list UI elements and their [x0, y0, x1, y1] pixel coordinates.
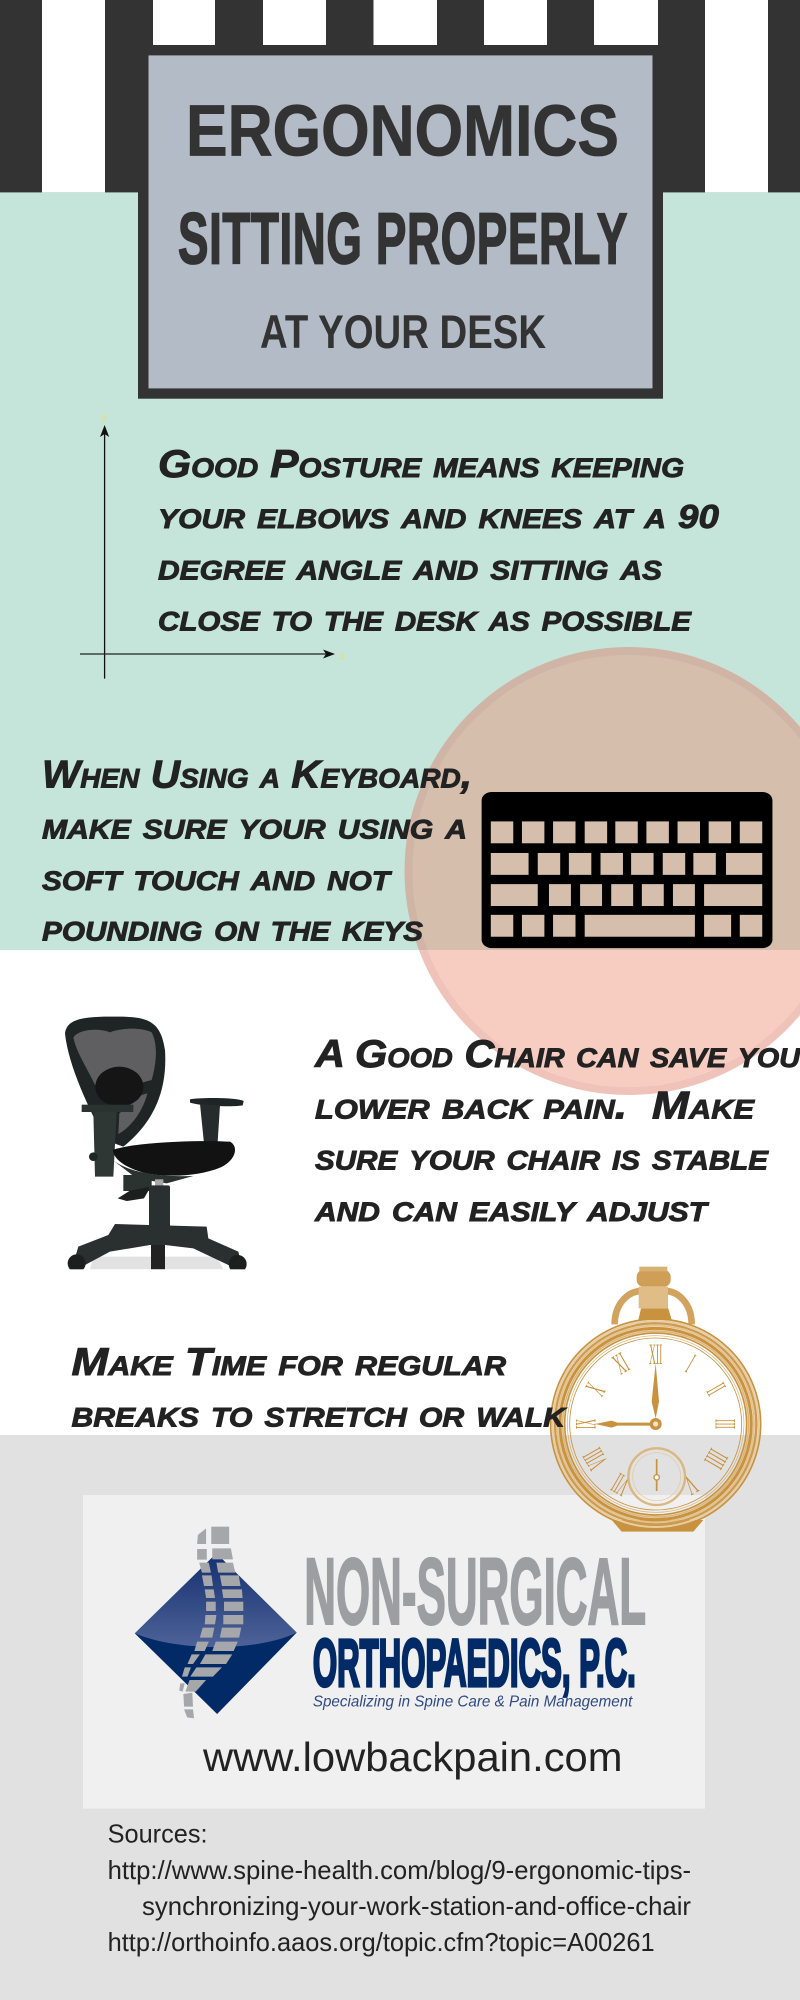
- icon: pocket watch: X: [579, 1377, 612, 1401]
- sources: http://orthoinfo.aaos.org/topic.cfm?topic=A00261: [108, 1927, 655, 1957]
- icon: pocket watch: IIII: [698, 1444, 734, 1474]
- sources: [108, 1818, 691, 1957]
- icon: pocket watch: VIII: [577, 1443, 614, 1475]
- icon: pocket watch: V: [678, 1467, 703, 1501]
- text: good posture: Good Posture means keeping: [158, 443, 684, 486]
- sources: http://www.spine-health.com/blog/9-ergonomic-tips-: [108, 1855, 691, 1885]
- title: ERGONOMICS: ERGONOMICS: [186, 91, 619, 171]
- text: good posture: degree angle and sitting as: [158, 546, 662, 588]
- text: keyboard tip: make sure your using a: [42, 805, 467, 848]
- icon: pocket watch: XII: [649, 1338, 662, 1371]
- text: chair tip: A Good Chair can save you: [314, 1033, 800, 1076]
- icon: pocket watch: VII: [607, 1466, 635, 1502]
- icon: office chair: [63, 1017, 253, 1283]
- sources: synchronizing-your-work-station-and-office-chair: [142, 1891, 691, 1921]
- text: time tip: breaks to stretch or walk: [72, 1393, 568, 1436]
- logo: Non-Surgical Orthopaedics: [135, 1527, 646, 1718]
- decorative circle behind keyboard: [408, 651, 800, 1091]
- website url: www.lowbackpain.com: [202, 1734, 622, 1780]
- icon: pocket watch: I: [681, 1349, 700, 1379]
- sources: Sources:: [108, 1818, 208, 1848]
- icon: pocket watch: XI: [607, 1347, 634, 1381]
- chart: right angle axes: x: [339, 648, 346, 663]
- title: AT YOUR DESK: AT YOUR DESK: [260, 305, 546, 358]
- icon: spine diamond: [135, 1527, 297, 1718]
- icon: pocket watch: IX: [570, 1419, 603, 1429]
- text: keyboard tip: When Using a Keyboard,: [42, 753, 472, 796]
- text: good posture: [158, 443, 720, 639]
- icon: keyboard: [482, 792, 772, 948]
- chart: right angle axes: y: [101, 409, 108, 424]
- text: chair tip: [314, 1033, 800, 1230]
- striped awning header: [0, 0, 800, 192]
- title panel: [138, 45, 663, 399]
- text: chair tip: sure your chair is stable: [315, 1136, 769, 1178]
- text: keyboard tip: [42, 753, 472, 950]
- text: keyboard tip: soft touch and not: [42, 856, 393, 899]
- icon: pocket watch: II: [700, 1378, 732, 1400]
- icon: pocket watch: III: [709, 1419, 742, 1429]
- logo tagline: Specializing in Spine Care & Pain Management: [313, 1693, 634, 1711]
- text: keyboard tip: pounding on the keys: [42, 906, 423, 950]
- panel: mint background: [0, 192, 800, 950]
- chart: right angle axes: [80, 409, 346, 679]
- panel: logo card: [83, 1495, 705, 1809]
- text: time tip: Make Time for regular: [72, 1341, 507, 1384]
- panel: grey footer background: [0, 1435, 800, 2000]
- text: good posture: your elbows and knees at a 90: [158, 494, 720, 537]
- text: chair tip: lower back pain. Make: [315, 1084, 755, 1128]
- text: time tip: [72, 1341, 568, 1436]
- text: chair tip: and can easily adjust: [314, 1187, 710, 1230]
- text: good posture: close to the desk as possible: [158, 596, 692, 639]
- icon: pocket watch: [551, 1267, 761, 1532]
